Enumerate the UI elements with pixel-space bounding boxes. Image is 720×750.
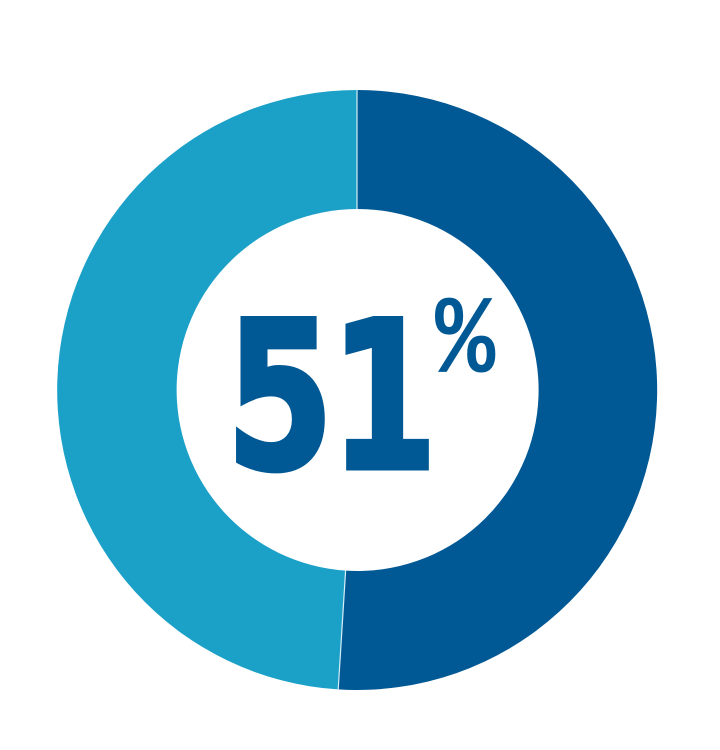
segment: 51 percent (dark blue) [338, 90, 657, 690]
segment: remaining 49 percent (light blue) [57, 90, 357, 689]
segment divider: bottom [338, 571, 346, 689]
percent sign: % [435, 280, 496, 406]
segment divider: top [356, 90, 358, 209]
value: 51: 51 [226, 277, 434, 517]
